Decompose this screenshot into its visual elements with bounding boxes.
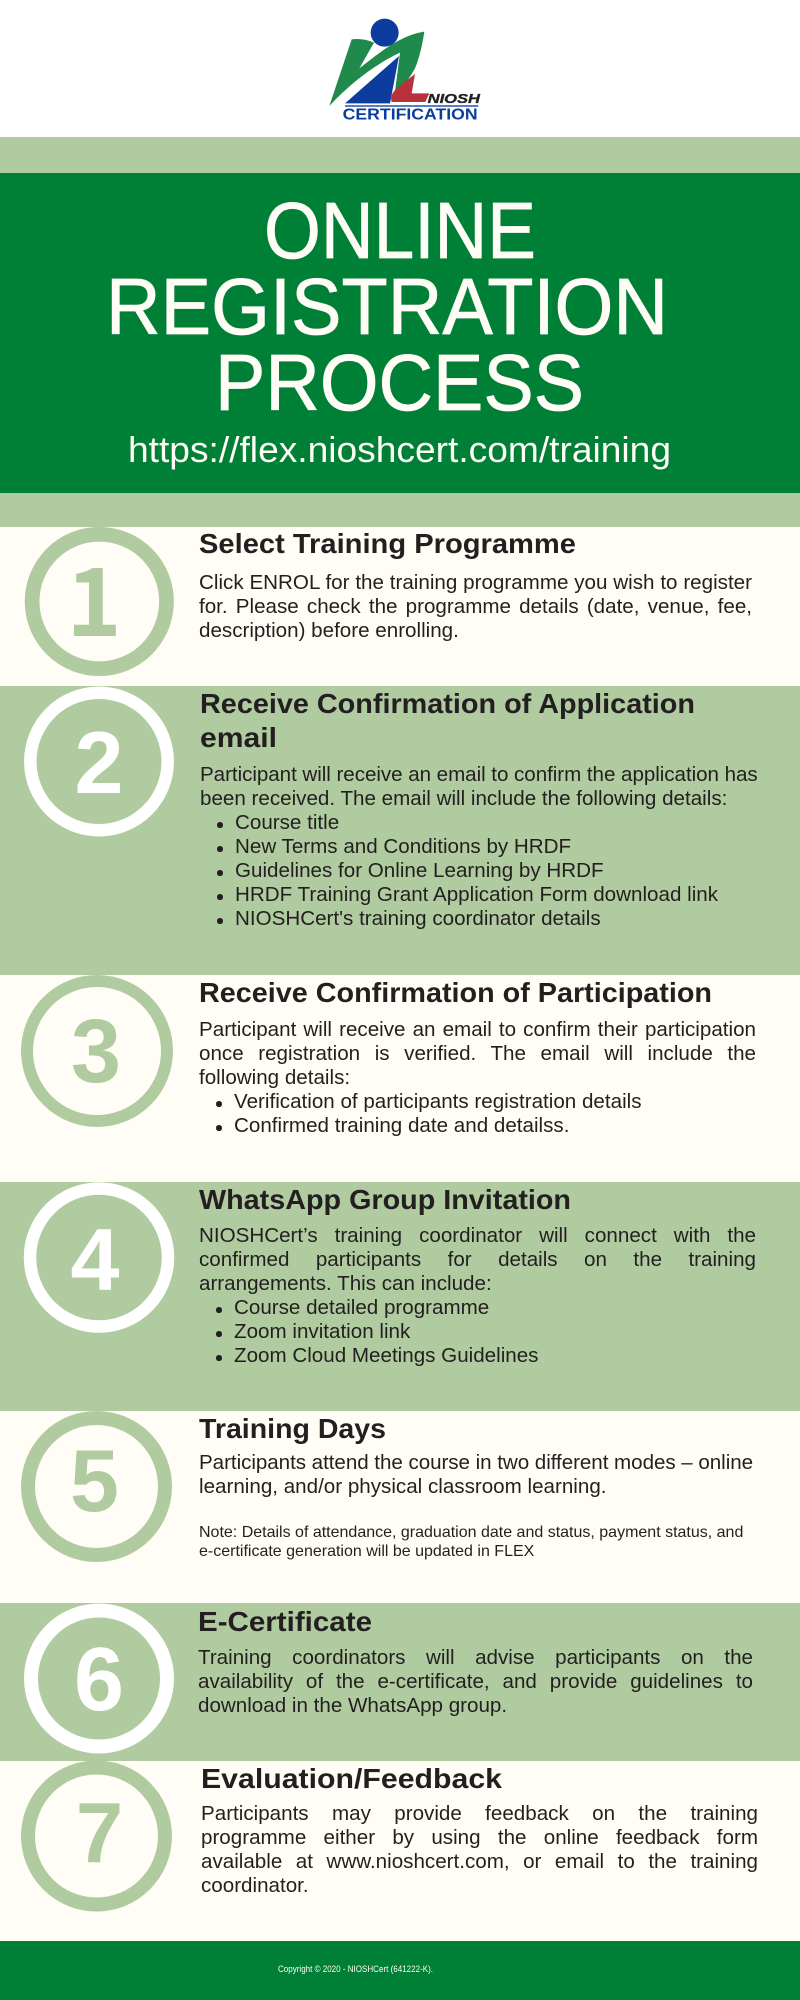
step 4 badge: 4 <box>71 1210 120 1309</box>
logo: rule <box>345 105 478 107</box>
step 3 text: Participant will receive an email to confirm their participation <box>199 1018 756 1041</box>
step 7 badge <box>28 1768 165 1904</box>
title line: ONLINE: ONLINE <box>264 186 536 275</box>
step 7 text: coordinator. <box>201 1874 309 1897</box>
step 5 heading: Training Days <box>199 1413 386 1444</box>
step 2 badge <box>30 693 168 830</box>
step 4 text <box>199 1224 756 1367</box>
panel: step 7 <box>0 1761 800 1941</box>
step 7 text: programme either by using the online feedback form <box>201 1826 758 1849</box>
step 5 badge: 5 <box>70 1431 119 1530</box>
step 2 text: been received. The email will include the following details: <box>200 787 727 810</box>
step 6 badge <box>31 1610 167 1746</box>
logo: NIOSH wordmark: NIOSH <box>428 91 480 106</box>
step 3 heading: Receive Confirmation of Participation <box>199 977 712 1008</box>
step 3 text: following details: <box>199 1066 350 1089</box>
step 3 list <box>216 1090 642 1137</box>
step 7 badge: 7 <box>76 1786 123 1881</box>
step 4 text: arrangements. This can include: <box>199 1272 492 1295</box>
step 1 text <box>199 571 752 642</box>
step 1 text: description) before enrolling. <box>199 619 459 642</box>
step 3 list: Confirmed training date and detailss. <box>234 1114 569 1137</box>
panel: step 1 <box>0 527 800 686</box>
title line: PROCESS: PROCESS <box>215 338 584 427</box>
panel: step 3 <box>0 975 800 1182</box>
step 5 text: Participants attend the course in two different modes – online <box>199 1451 753 1474</box>
step 2 heading: email <box>200 722 277 753</box>
logo: blue head <box>371 19 399 47</box>
step 2 badge: 2 <box>75 713 123 812</box>
step 5 text <box>199 1451 753 1498</box>
step 6 badge: 6 <box>74 1630 124 1730</box>
step 7 text: Participants may provide feedback on the training <box>201 1802 758 1825</box>
step 1 text: Click ENROL for the training programme you wish to register <box>199 571 752 594</box>
step 4 list: Zoom invitation link <box>234 1320 410 1343</box>
step 6 text: availability of the e-certificate, and provide guidelines to <box>198 1670 753 1693</box>
hero banner <box>0 137 800 527</box>
step 2 heading <box>200 688 695 753</box>
step 4 list <box>216 1296 538 1367</box>
logo: red L <box>391 74 429 102</box>
step 1 text: for. Please check the programme details (date, venue, fee, <box>199 595 752 618</box>
logo <box>0 0 800 137</box>
step 2 list: New Terms and Conditions by HRDF <box>235 835 571 858</box>
step 5 badge <box>28 1418 165 1555</box>
panel: step 2 <box>0 686 800 975</box>
title line: REGISTRATION: REGISTRATION <box>106 262 668 351</box>
step 5 note: Note: Details of attendance, graduation date and status, payment status, and e-certificate generation will be updated in FLEX <box>199 1524 743 1560</box>
panel: step 6 <box>0 1603 800 1761</box>
logo: green figure <box>329 32 424 106</box>
hero: green title panel <box>0 173 800 493</box>
step 5 text: learning, and/or physical classroom learning. <box>199 1475 607 1498</box>
panel: step 5 <box>0 1411 800 1603</box>
step 2 text: Participant will receive an email to confirm the application has <box>200 763 758 786</box>
logo: blue triangle <box>345 56 399 103</box>
step 2 list: NIOSHCert's training coordinator details <box>235 907 601 930</box>
step 3 text: once registration is verified. The email will include the <box>199 1042 756 1065</box>
step 4 heading: WhatsApp Group Invitation <box>199 1184 571 1215</box>
step 2 list: HRDF Training Grant Application Form download link <box>235 883 718 906</box>
step 4 list: Zoom Cloud Meetings Guidelines <box>234 1344 538 1367</box>
step 7 heading: Evaluation/Feedback <box>201 1763 503 1794</box>
copyright: Copyright © 2020 - NIOSHCert (641222-K). <box>278 1964 433 1974</box>
step 4 text: NIOSHCert’s training coordinator will connect with the <box>199 1224 756 1247</box>
panel: step 4 <box>0 1182 800 1411</box>
step 2 heading: Receive Confirmation of Application <box>200 688 695 719</box>
footer <box>0 1941 800 2000</box>
step 2 list: Course title <box>235 811 339 834</box>
step 3 text <box>199 1018 756 1137</box>
step 6 text: Training coordinators will advise participants on the <box>198 1646 753 1669</box>
step 6 text <box>198 1646 753 1717</box>
step 3 list: Verification of participants registration details <box>234 1090 642 1113</box>
step 4 list: Course detailed programme <box>234 1296 489 1319</box>
step 4 text: confirmed participants for details on the training <box>199 1248 756 1271</box>
step 1 badge: 1 <box>66 528 122 664</box>
url: https://flex.nioshcert.com/training <box>128 429 671 470</box>
step 2 list <box>217 811 718 930</box>
step 2 list: Guidelines for Online Learning by HRDF <box>235 859 604 882</box>
step 3 badge: 3 <box>71 1002 121 1102</box>
step 7 text: available at www.nioshcert.com, or email to the training <box>201 1850 758 1873</box>
logo: CERTIFICATION wordmark: CERTIFICATION <box>343 106 478 123</box>
step 6 heading: E-Certificate <box>198 1606 372 1637</box>
step 4 badge <box>30 1188 168 1326</box>
step 7 text <box>201 1802 758 1897</box>
step 1 heading: Select Training Programme <box>199 528 576 559</box>
step 3 badge <box>27 981 167 1121</box>
step 1 badge <box>32 528 166 669</box>
step 2 text <box>200 763 758 930</box>
step 6 text: download in the WhatsApp group. <box>198 1694 507 1717</box>
